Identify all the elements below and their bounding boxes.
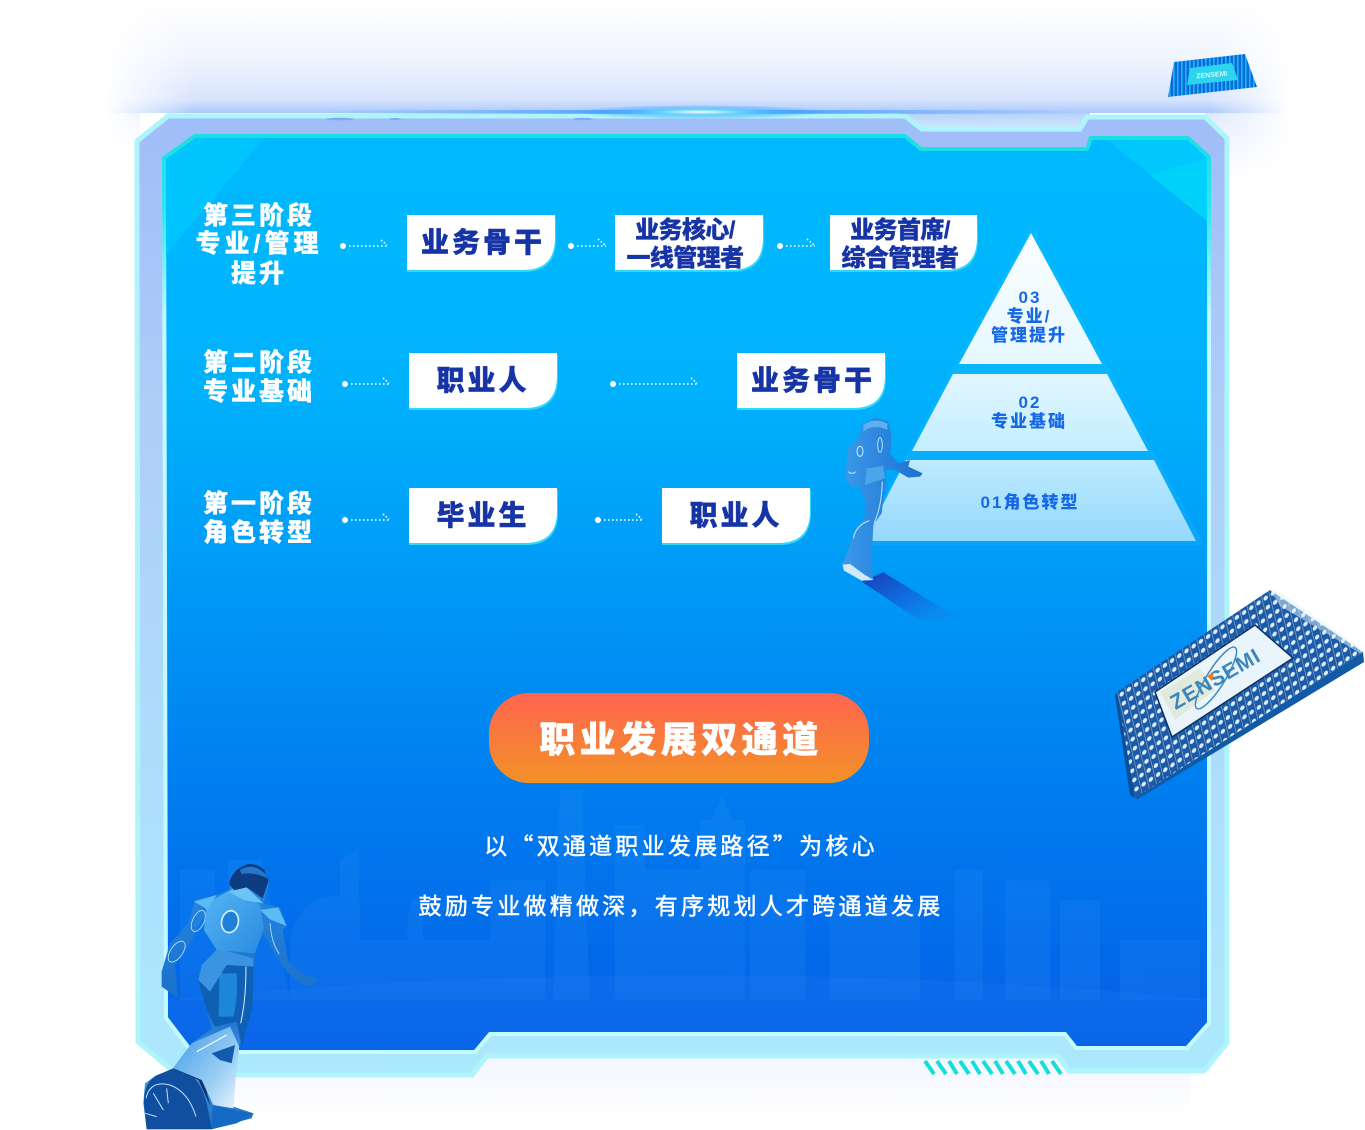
arrow: backbone to core	[568, 239, 606, 249]
arrow: core to chief	[777, 239, 815, 249]
box: 业务骨干 (stage 2)	[737, 353, 886, 410]
pyramid level 02: 02	[1019, 393, 1041, 412]
robot torso	[204, 888, 264, 953]
chip	[1115, 590, 1364, 799]
panel: main blue area	[164, 136, 1209, 1052]
box: 业务骨干 (stage 2): 业务骨干	[751, 365, 875, 396]
robot collar	[228, 887, 263, 903]
robot details	[843, 421, 887, 581]
chip: ZENSEMI	[1167, 644, 1265, 714]
arrow: stage 2 to professional	[342, 378, 390, 387]
pyramid glow	[858, 225, 1204, 545]
box: 毕业生: 毕业生	[436, 500, 530, 531]
box: 职业人 (stage 2)	[409, 353, 558, 410]
robot rear foot	[144, 1068, 212, 1129]
arrow: stage 1 to graduate	[342, 514, 390, 523]
arrow: professional to backbone	[610, 378, 698, 387]
pyramid level 03: 专业/	[1007, 306, 1051, 326]
stage 3 label: 第三阶段	[203, 201, 315, 230]
pyramid chart	[858, 225, 1204, 545]
orange title button: 职业发展双通道	[539, 719, 823, 760]
small robot	[842, 417, 953, 622]
pyramid level 03: 管理提升	[991, 325, 1067, 345]
robot shadow	[862, 572, 953, 622]
stage 3 label	[196, 201, 322, 288]
pyramid level 02: 专业基础	[991, 411, 1067, 431]
frame: outer band	[137, 116, 1227, 1075]
robot head	[229, 864, 268, 898]
box: 业务骨干 (stage 3)	[407, 215, 556, 272]
mini chip top right: ZENSEMI	[1196, 71, 1228, 80]
stage 1 label: 角色转型	[203, 518, 315, 547]
stage 3 label: 提升	[231, 260, 287, 288]
pyramid level 01	[864, 460, 1196, 541]
box: 业务核心/一线管理者	[615, 215, 764, 272]
top light streak	[320, 105, 1080, 120]
stage 2 label	[203, 348, 315, 406]
box: 业务首席/综合管理者	[830, 215, 978, 272]
large robot	[143, 864, 317, 1129]
box: 业务骨干 (stage 3): 业务骨干	[421, 227, 545, 258]
orange title button	[489, 693, 869, 783]
robot arm rings	[165, 908, 279, 965]
box: 职业人 (stage 2): 职业人	[436, 365, 530, 396]
description text	[418, 827, 944, 921]
stage 1 label	[203, 489, 315, 547]
box: 职业人 (stage 1): 职业人	[689, 500, 783, 531]
robot silhouette	[143, 864, 317, 1129]
robot front foot	[212, 1105, 254, 1129]
pyramid level 02	[912, 374, 1148, 451]
box: 毕业生	[409, 488, 558, 545]
city skyline	[180, 790, 1200, 1000]
box: 业务首席/综合管理者: 业务首席/	[850, 216, 951, 244]
robot thigh	[198, 965, 253, 1047]
robot lower leg	[173, 1027, 239, 1108]
box: 业务首席/综合管理者: 综合管理者	[842, 244, 958, 272]
arrows	[340, 239, 815, 523]
robot shoulders	[194, 895, 287, 926]
pyramid level 01: 01角色转型	[981, 492, 1079, 512]
arrow: stage 3 to backbone	[340, 240, 388, 249]
robot silhouette	[842, 417, 923, 581]
box: 职业人 (stage 1)	[662, 488, 811, 545]
stage 1 label: 第一阶段	[203, 489, 315, 518]
bottom stripes	[925, 1061, 1061, 1074]
ground arc	[160, 975, 1215, 1060]
stage 2 label: 专业基础	[203, 377, 315, 406]
mini chip top right	[1168, 54, 1257, 97]
pyramid level 03: 03	[1019, 288, 1041, 307]
pyramid level 03	[959, 233, 1102, 364]
robot pelvis	[198, 948, 253, 992]
stage 3 label: 专业/管理	[196, 229, 322, 258]
description text: 鼓励专业做精做深，有序规划人才跨通道发展	[418, 887, 944, 921]
arrow: graduate to professional	[595, 514, 643, 523]
box: 业务核心/一线管理者: 一线管理者	[626, 244, 744, 272]
stage 2 label: 第二阶段	[203, 348, 315, 377]
box: 业务核心/一线管理者: 业务核心/	[635, 216, 736, 244]
description text: 以“双通道职业发展路径”为核心	[484, 827, 878, 861]
